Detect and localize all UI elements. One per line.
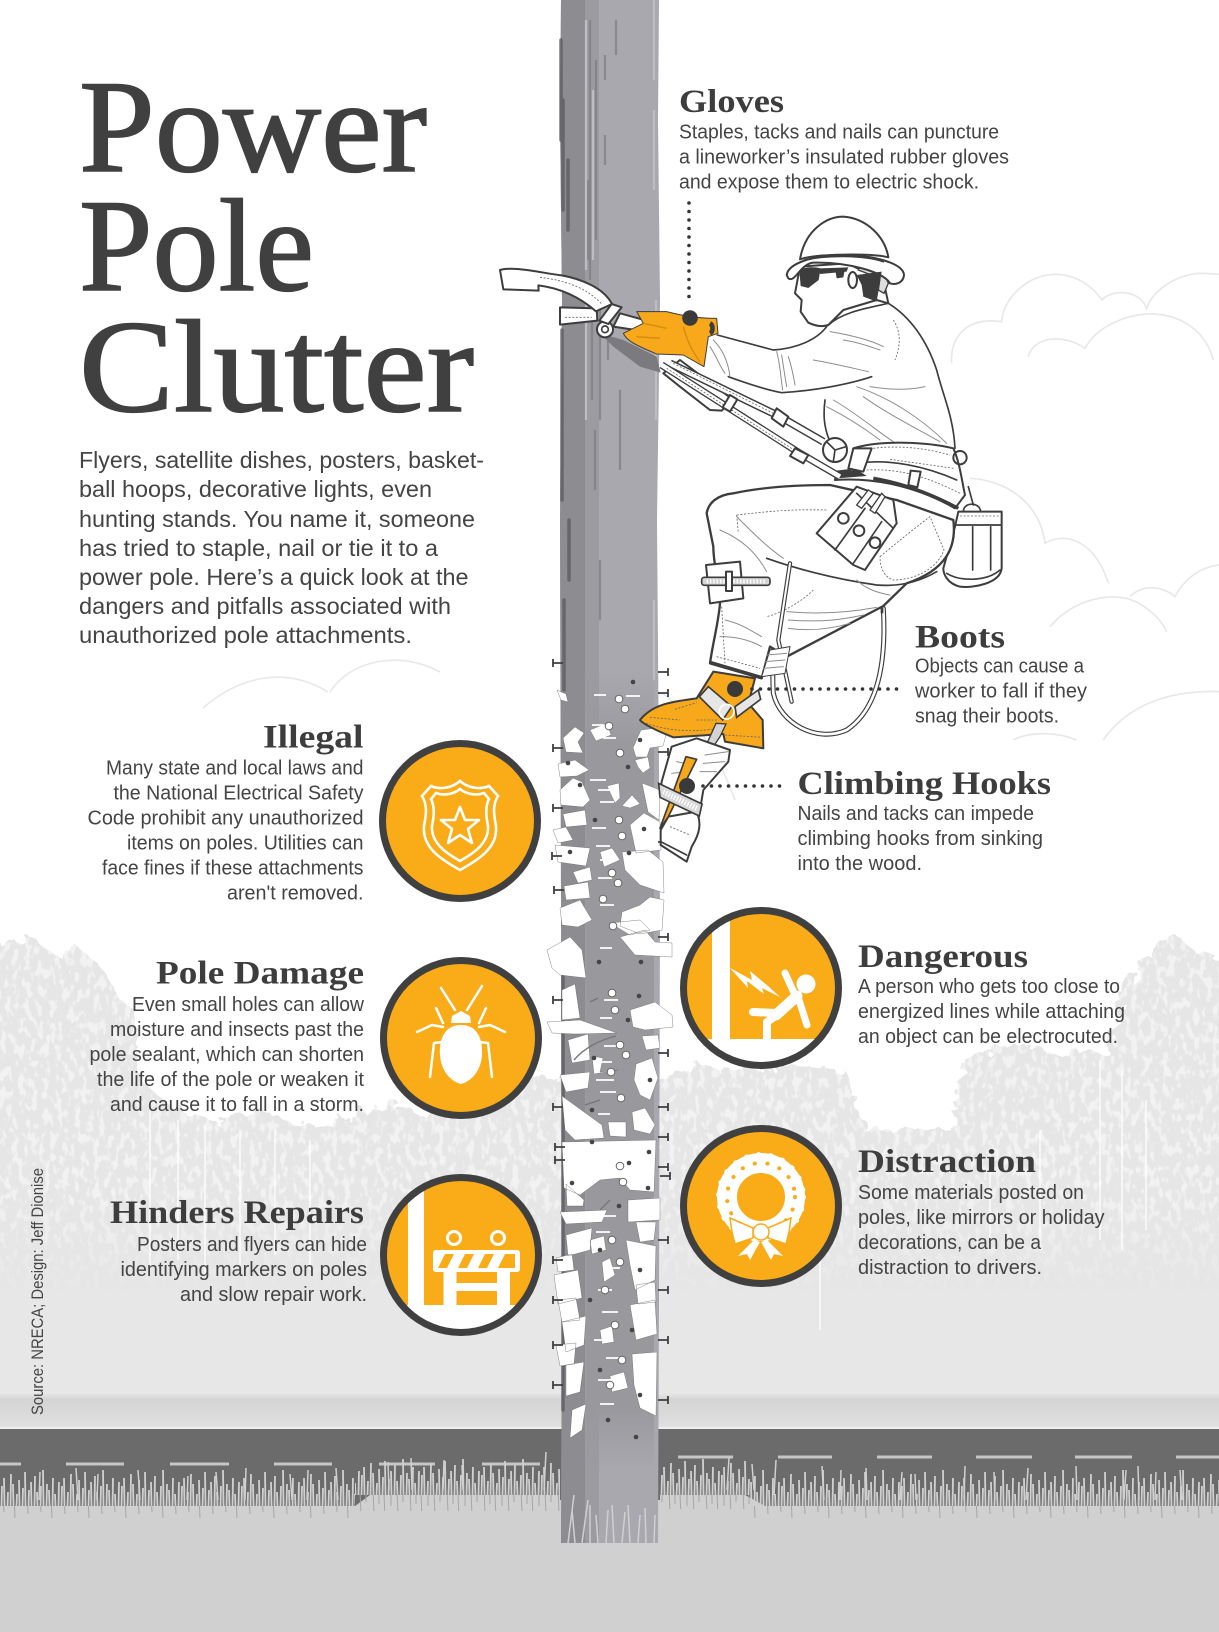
- background: tree line: [0, 930, 1219, 1400]
- text: boots: Boots: [915, 620, 1005, 656]
- intro text: hunting stands. You name it, someone: [79, 506, 475, 532]
- text: dangerous: Dangerous: [858, 939, 1028, 975]
- text: climbing hooks: Nails and tacks can impede: [798, 803, 1034, 825]
- icon: electrocution warning (dangerous): [680, 907, 842, 1069]
- text: illegal: items on poles. Utilities can: [127, 832, 364, 854]
- knee strap: [702, 562, 770, 603]
- pole base grass: [568, 1495, 655, 1550]
- text: distraction: decorations, can be a: [858, 1232, 1042, 1254]
- text: illegal: Code prohibit any unauthorized: [88, 808, 364, 830]
- bucket bag: [943, 487, 1002, 587]
- title: Pole: [79, 172, 314, 319]
- text: illegal: Many state and local laws and: [106, 758, 364, 780]
- text: distraction: poles, like mirrors or holiday: [858, 1207, 1104, 1229]
- text: pole damage: moisture and insects past the: [110, 1019, 364, 1041]
- upper boot: [640, 672, 763, 752]
- glove shadow on pole: [600, 333, 661, 373]
- text: gloves: Gloves: [679, 84, 784, 120]
- safety strap around pole: [500, 269, 647, 337]
- illustration: lineworker climbing the pole: [500, 217, 1002, 862]
- title: Clutter: [79, 293, 474, 440]
- text: illegal: [88, 720, 364, 904]
- intro text: has tried to staple, nail or tie it to a: [79, 535, 439, 561]
- title: [79, 53, 474, 440]
- text: distraction: [858, 1144, 1104, 1279]
- text: hinders repairs: identifying markers on poles: [120, 1259, 367, 1281]
- text: dangerous: energized lines while attaching: [858, 1001, 1125, 1023]
- background: clouds: [203, 273, 1219, 800]
- text: pole damage: Even small holes can allow: [132, 994, 365, 1016]
- intro text: Flyers, satellite dishes, posters, basket-: [79, 447, 484, 473]
- horizon band: [0, 1393, 1219, 1428]
- lower leg and climbing hook: [659, 738, 730, 862]
- text: pole damage: [90, 956, 365, 1116]
- text: pole damage: Pole Damage: [156, 956, 364, 992]
- pole clutter: staples, posters and nails: [547, 659, 673, 1470]
- text: hinders repairs: Hinders Repairs: [110, 1195, 364, 1231]
- power pole: [560, 0, 660, 1550]
- road: [0, 1427, 1219, 1518]
- legs and trousers: [707, 485, 954, 702]
- safety rope loop: [773, 563, 884, 734]
- text: hinders repairs: and slow repair work.: [180, 1284, 367, 1306]
- text: illegal: aren't removed.: [227, 882, 364, 904]
- icon: road barricade (hinders repairs): [380, 1174, 542, 1336]
- source credit: Source: NRECA; Design: Jeff Dionise: [29, 1168, 47, 1415]
- intro text: dangers and pitfalls associated with: [79, 593, 451, 619]
- text: climbing hooks: climbing hooks from sinking: [798, 828, 1043, 850]
- text: illegal: the National Electrical Safety: [114, 782, 364, 804]
- text: boots: Objects can cause a: [915, 656, 1085, 678]
- text: distraction: distraction to drivers.: [858, 1257, 1042, 1279]
- text: distraction: Some materials posted on: [858, 1182, 1084, 1204]
- side nails: [552, 659, 670, 1404]
- head, hard hat and sunglasses: [787, 217, 904, 326]
- text: climbing hooks: [798, 766, 1051, 875]
- text: dangerous: A person who gets too close to: [858, 976, 1120, 998]
- text: boots: worker to fall if they: [914, 680, 1087, 702]
- text: boots: snag their boots.: [915, 706, 1059, 728]
- text: boots: [914, 620, 1087, 728]
- title: Power: [79, 53, 427, 200]
- callout: gloves pointer: [682, 203, 698, 326]
- intro text: [79, 447, 484, 648]
- text: illegal: face fines if these attachments: [102, 858, 364, 880]
- icon: insect (pole damage): [384, 960, 538, 1116]
- text: climbing hooks: Climbing Hooks: [798, 766, 1051, 802]
- text: distraction: Distraction: [858, 1144, 1036, 1180]
- text: gloves: and expose them to electric shock.: [679, 172, 979, 194]
- text: illegal: Illegal: [263, 720, 364, 756]
- text: hinders repairs: [110, 1195, 367, 1306]
- text: gloves: Staples, tacks and nails can puncture: [679, 122, 999, 144]
- work belt and lanyard: [662, 363, 967, 508]
- glove: [623, 312, 718, 367]
- text: climbing hooks: into the wood.: [798, 853, 922, 875]
- icon: police badge (illegal): [382, 744, 538, 898]
- intro text: unauthorized pole attachments.: [79, 622, 412, 648]
- callout: boots pointer: [727, 681, 902, 697]
- intro text: ball hoops, decorative lights, even: [79, 476, 432, 502]
- callout: climbing hooks pointer: [679, 778, 788, 794]
- text: dangerous: [858, 939, 1125, 1048]
- dark nail heads: [566, 680, 652, 1439]
- tool pouch: [817, 487, 897, 570]
- text: pole damage: and cause it to fall in a storm.: [110, 1094, 364, 1116]
- text: pole damage: pole sealant, which can shorten: [90, 1044, 364, 1066]
- road dashes: [0, 1457, 1219, 1464]
- text: hinders repairs: Posters and flyers can hide: [137, 1234, 367, 1256]
- ground and grass: [0, 1452, 1219, 1632]
- text: pole damage: the life of the pole or weaken it: [97, 1069, 364, 1091]
- text: gloves: a lineworker’s insulated rubber gloves: [679, 146, 1009, 168]
- text: dangerous: an object can be electrocuted.: [858, 1026, 1118, 1048]
- white nail heads: [599, 695, 630, 1389]
- torso and arm: [663, 303, 955, 457]
- icon: wreath (distraction): [684, 1128, 838, 1284]
- intro text: power pole. Here’s a quick look at the: [79, 564, 468, 590]
- text: gloves: [679, 84, 1009, 194]
